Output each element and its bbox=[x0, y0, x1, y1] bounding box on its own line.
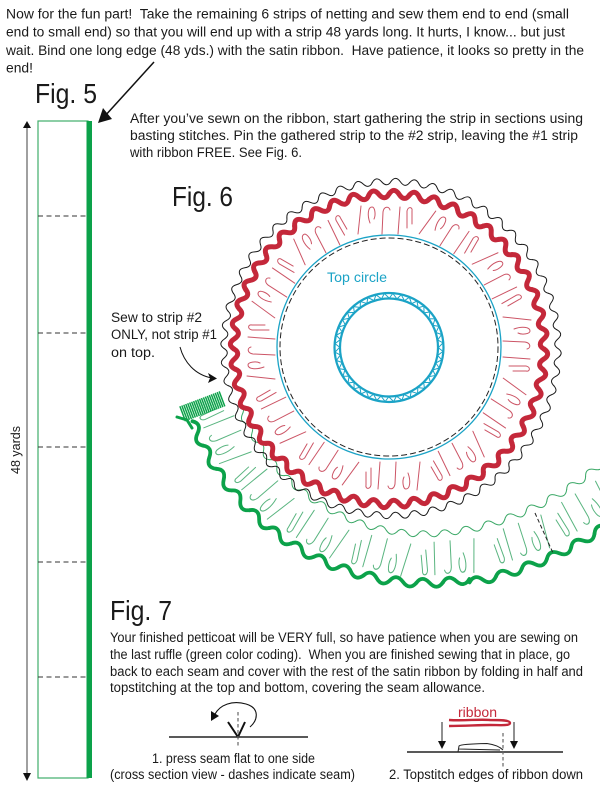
heading: Fig. 5: Fig. 5 bbox=[35, 78, 97, 109]
intro text: Now for the fun part! Take the remaining 6 strips of netting and sew them end to end (small bbox=[6, 7, 569, 22]
callout: sew to strip #2: Sew to strip #2 bbox=[111, 310, 202, 325]
red gathering stitches bbox=[247, 206, 531, 490]
right arrow bbox=[510, 722, 518, 749]
seam dashes bbox=[535, 513, 553, 553]
paragraph: finishing instructions: the last ruffle (green color coding). When you are finished sewing that in place, go bbox=[110, 647, 570, 662]
teal circle seam bbox=[277, 235, 501, 459]
green thin inner edge bbox=[235, 403, 600, 538]
green ribbon edge bbox=[188, 420, 600, 588]
callout: sew to strip #2: ONLY, not strip #1 bbox=[111, 327, 217, 342]
paragraph: finishing instructions: Your finished petticoat will be VERY full, so have patience when you are sewing on bbox=[110, 630, 578, 645]
dashed basting line bbox=[280, 238, 498, 456]
figure 6: green ruffle strip #3 bbox=[177, 398, 600, 588]
figure 6: ruffle circle bbox=[126, 106, 600, 569]
intro text bbox=[5, 7, 584, 76]
figure 5: netting strip bbox=[38, 121, 92, 778]
paragraph: gathering instructions bbox=[129, 111, 583, 160]
intro text: end! bbox=[6, 61, 33, 76]
paragraph: gathering instructions: After you’ve sewn on the ribbon, start gathering the strip in sections using bbox=[130, 111, 583, 126]
diagram: topstitch ribbon bbox=[407, 720, 563, 769]
callout: sew to strip #2 bbox=[111, 310, 217, 360]
heading: Fig. 7: Fig. 7 bbox=[110, 595, 172, 626]
green gathering stitches bbox=[198, 403, 600, 577]
curved arrow bbox=[211, 703, 256, 727]
heading: Fig. 6: Fig. 6 bbox=[172, 181, 233, 212]
caption: step 2: 2. Topstitch edges of ribbon down bbox=[389, 767, 583, 782]
label: 48 yards: 48 yards bbox=[9, 426, 23, 474]
callout: sew to strip #2: on top. bbox=[111, 345, 155, 360]
caption: step 1: 1. press seam flat to one side bbox=[152, 751, 315, 766]
intro text: end to small end) so that you will end up with a strip 48 yards long. It hurts, I know... but just bbox=[6, 25, 565, 40]
paragraph: finishing instructions: topstitching at the top and bottom, covering the seam allowance. bbox=[110, 680, 485, 695]
label: ribbon: ribbon bbox=[458, 705, 497, 720]
intro text: wait. Bind one long edge (48 yds.) with the satin ribbon. Have patience, it looks so pretty in the bbox=[5, 43, 584, 58]
diagram: press seam flat bbox=[169, 703, 308, 748]
arrow: pointing to ribbon edge bbox=[98, 62, 154, 123]
paragraph: finishing instructions bbox=[110, 630, 583, 695]
gathered end of green strip bbox=[177, 398, 223, 428]
caption: step 1: (cross section view - dashes indicate seam) bbox=[110, 767, 355, 782]
left arrow bbox=[438, 722, 446, 749]
label: Top circle: Top circle bbox=[327, 269, 387, 285]
arrow: 48 yards dimension bbox=[23, 121, 31, 781]
paragraph: gathering instructions: with ribbon FREE. See Fig. 6. bbox=[129, 145, 302, 160]
paragraph: gathering instructions: basting stitches. Pin the gathered strip to the #2 strip, leaving the #1 strip bbox=[130, 128, 578, 143]
arrow: callout to wavy edge bbox=[180, 347, 217, 383]
ribbon folded bbox=[449, 720, 510, 726]
paragraph: finishing instructions: back to each seam and cover with the rest of the satin ribbon by folding in half and bbox=[110, 664, 583, 679]
red ribbon wavy edge bbox=[126, 106, 600, 561]
black wavy edge, strip #1 bbox=[176, 148, 600, 569]
caption: step 1 bbox=[110, 751, 355, 782]
top circle ring bbox=[311, 269, 460, 417]
